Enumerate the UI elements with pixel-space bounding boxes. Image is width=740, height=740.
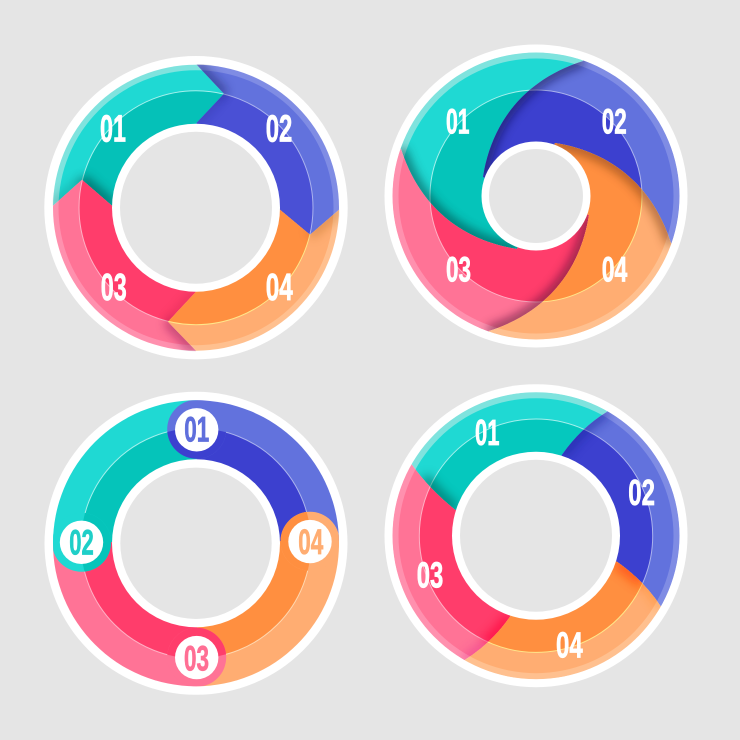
badge 03 disc [175,636,218,679]
cap orange [280,512,339,571]
segment 01 teal [412,392,608,510]
cap pink [167,628,226,686]
segment 02 blue [483,60,680,243]
segment orange [197,541,339,686]
label 01: 01 [446,102,470,141]
label 04: 04 [602,251,628,290]
label 01: 01 [100,109,126,151]
label 04: 04 [266,267,293,309]
segment 03 pink [53,180,196,352]
segment 03 pink [392,464,510,660]
segment 03 pink [392,148,589,332]
label 02: 02 [602,102,627,141]
segment 04 orange [464,561,661,680]
label 04: 04 [556,624,583,665]
badge label 01: 01 [184,411,209,450]
ring: swirl segments (top right) [384,44,688,348]
centre hole [112,459,280,627]
cap teal [53,512,111,572]
label 03: 03 [446,251,471,290]
segment pink [53,542,197,686]
label 02: 02 [266,109,292,151]
segment 01 teal [400,52,583,249]
segment blue [196,400,339,542]
badge label 03: 03 [184,640,209,678]
centre hole [482,142,590,250]
segment 02 blue [196,64,339,234]
centre hole [452,452,620,620]
centre hole [112,124,280,292]
badge 01 disc [175,408,218,452]
label 01: 01 [475,412,500,453]
ring: arrow segments (top left) [44,56,348,359]
segment teal [53,400,197,542]
ring: badge segments (bottom left) [44,392,348,695]
ring: curved slice segments (bottom right) [384,384,688,687]
segment 02 blue [562,411,680,606]
badge 04 disc [288,520,332,563]
label 02: 02 [628,472,655,513]
segment 01 teal [52,64,224,206]
segment 04 orange [168,210,340,351]
badge label 02: 02 [69,524,94,562]
badge 02 disc [60,521,103,564]
segment 04 orange [489,143,672,340]
label 03: 03 [101,267,127,309]
label 03: 03 [417,554,443,595]
cap blue [167,400,226,459]
badge label 04: 04 [298,523,324,562]
